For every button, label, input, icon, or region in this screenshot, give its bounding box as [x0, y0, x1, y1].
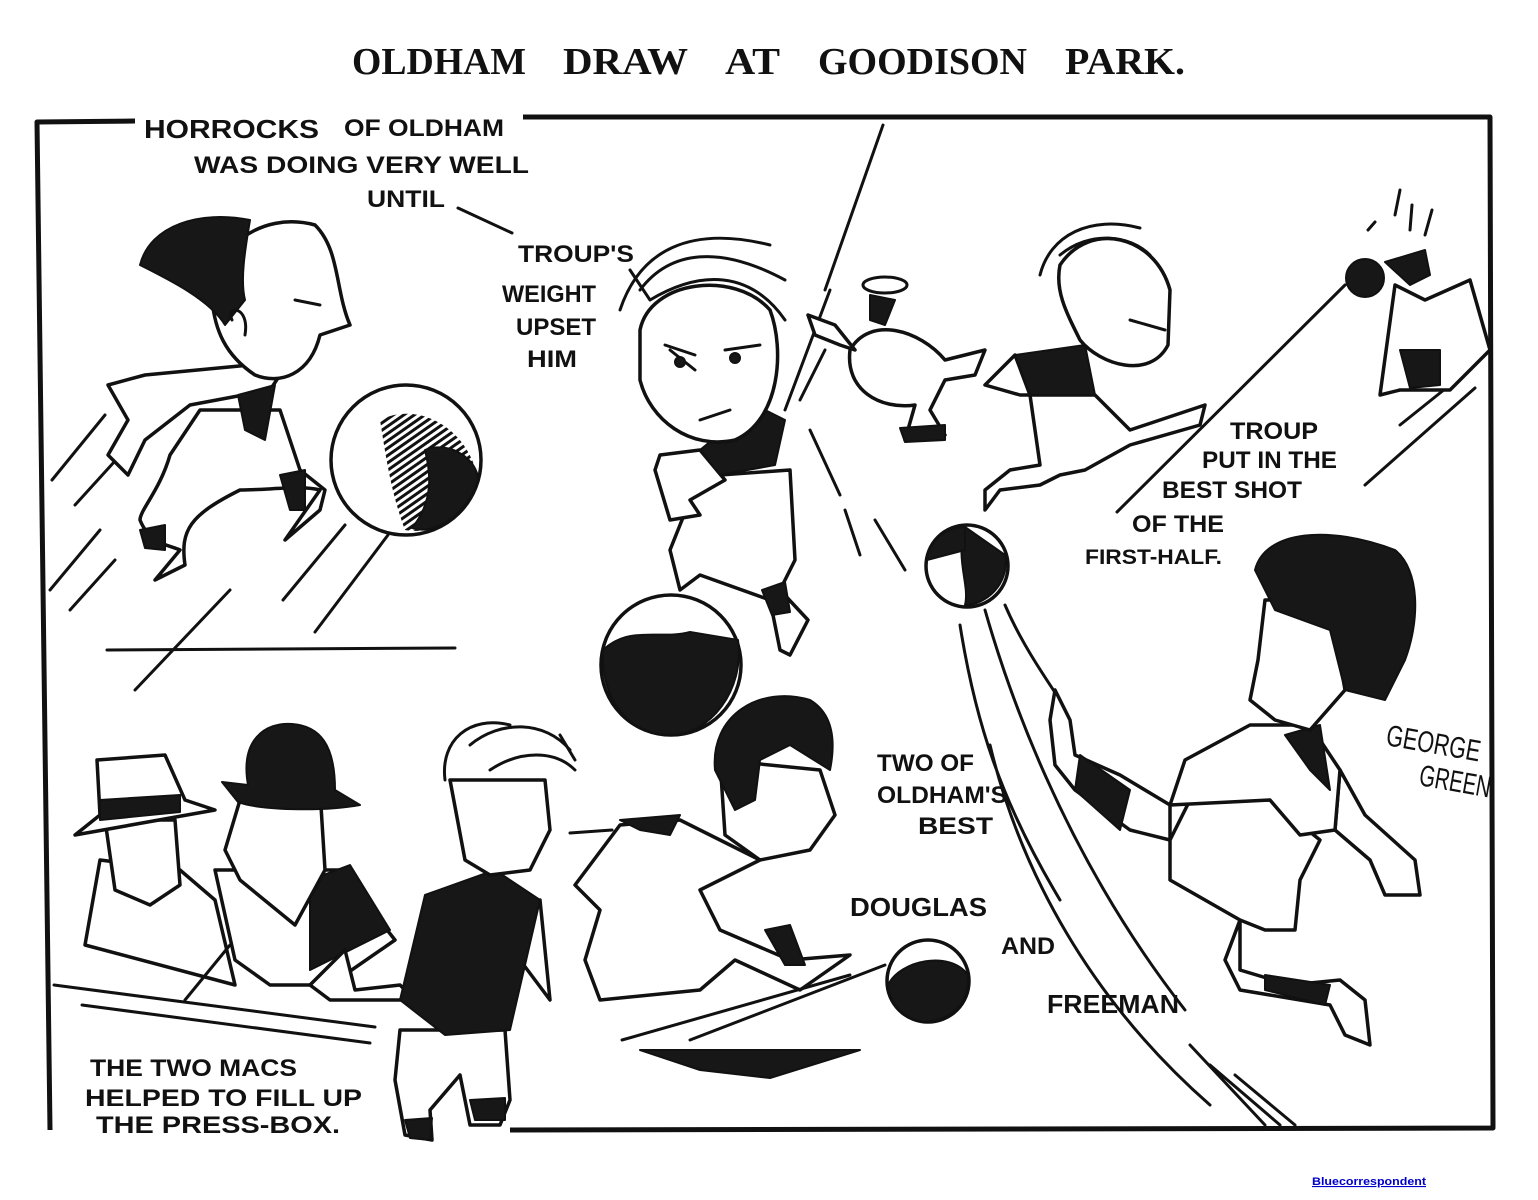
caption: Troup's weight	[502, 241, 634, 373]
caption: Troup best shot: BEST SHOT	[1162, 477, 1302, 504]
caption: Troup best shot	[1085, 418, 1337, 569]
caption: two of Oldham's best: AND	[1001, 933, 1055, 960]
caption: two Macs: THE TWO MACS	[90, 1055, 297, 1082]
caption: two of Oldham's best: DOUGLAS	[850, 892, 987, 922]
caption: two of Oldham's best: OLDHAM'S	[877, 782, 1007, 809]
title: GOODISON	[818, 41, 1027, 83]
figure: falling player	[808, 277, 985, 442]
figure: Douglas running	[570, 696, 885, 1078]
caption: Troup best shot: PUT IN THE	[1202, 447, 1337, 474]
caption: Horrocks: HORROCKS	[144, 114, 319, 144]
figure: two Macs	[54, 724, 395, 1043]
caption: Troup best shot: TROUP	[1230, 418, 1318, 445]
figure: Troup shooting	[985, 224, 1205, 510]
figure: goalkeeper heading ball	[1346, 190, 1490, 395]
caption: two Macs: THE PRESS-BOX.	[96, 1112, 340, 1139]
caption: Horrocks	[144, 114, 529, 233]
figure: Troup centre	[620, 238, 808, 655]
caption: Troup's weight: HIM	[527, 346, 577, 373]
caption: Horrocks: OF OLDHAM	[344, 115, 504, 142]
caption: Troup's weight: UPSET	[516, 314, 596, 341]
caption: two Macs: HELPED TO FILL UP	[85, 1085, 362, 1112]
signature: GEORGE	[1384, 719, 1483, 768]
caption: Horrocks: WAS DOING VERY WELL	[194, 152, 529, 179]
title: PARK.	[1065, 41, 1185, 83]
figure: Horrocks	[50, 217, 455, 690]
caption: Troup best shot: FIRST-HALF.	[1085, 546, 1222, 569]
credit link text: Bluecorrespondent	[1312, 1176, 1426, 1188]
signature	[1384, 719, 1493, 804]
caption: Horrocks: UNTIL	[367, 186, 445, 213]
ball: Horrocks	[283, 385, 481, 632]
caption: two Macs	[85, 1055, 362, 1139]
signature: GREEN	[1417, 759, 1493, 804]
ball: Troup centre	[601, 595, 741, 735]
caption: Troup's weight: TROUP'S	[518, 241, 634, 268]
caption: Troup best shot: OF THE	[1132, 511, 1224, 538]
ball: Douglas	[887, 940, 969, 1022]
figure: Freeman from behind	[310, 723, 575, 1140]
diagonal pitch lines	[785, 125, 1475, 570]
figure: George Green	[1050, 535, 1420, 1045]
caption: two of Oldham's best: FREEMAN	[1047, 989, 1179, 1019]
caption: two of Oldham's best: TWO OF	[877, 750, 974, 777]
caption: Troup's weight: WEIGHT	[502, 281, 596, 308]
title	[352, 41, 1185, 83]
ball: Green's shot	[926, 525, 1295, 1125]
caption: two of Oldham's best: BEST	[918, 813, 993, 840]
title: OLDHAM	[352, 41, 526, 83]
caption: two of Oldham's best	[850, 750, 1179, 1019]
title: DRAW	[563, 41, 688, 83]
panel frame	[37, 117, 1493, 1130]
title: AT	[725, 41, 780, 83]
